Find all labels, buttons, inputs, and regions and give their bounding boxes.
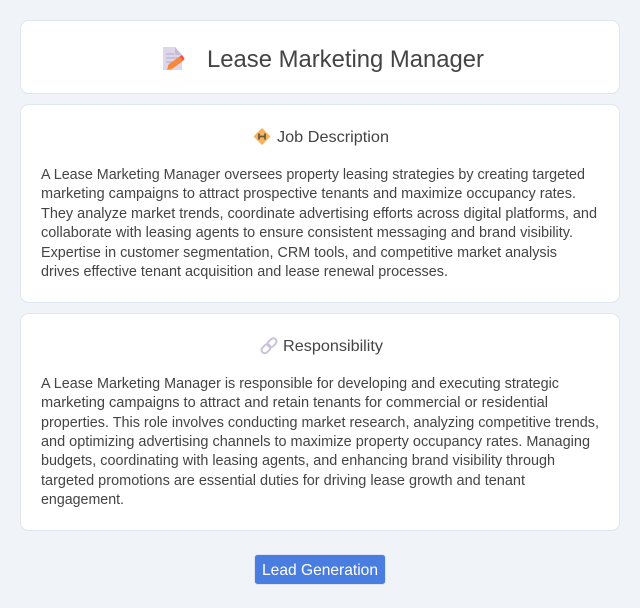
text block: responsibility — [41, 376, 599, 508]
panel: job description — [20, 104, 620, 302]
text block: job description: drives effective tenant acquisition and lease renewal processes. — [41, 264, 448, 280]
text block: responsibility: A Lease Marketing Manager is responsible for developing and executing strategic — [41, 376, 559, 392]
heading: Lease Marketing Manager: Lease Marketing Manager — [207, 46, 484, 73]
icon: chain link — [260, 337, 278, 355]
text block: job description: A Lease Marketing Manager oversees property leasing strategies by creating targeted — [41, 167, 585, 183]
text block: responsibility: marketing campaigns to attract and retain tenants for commercial or residential — [41, 395, 548, 411]
panel: title — [20, 20, 620, 94]
text block: responsibility: targeted promotions are essential duties for driving lease growth and tenant — [41, 473, 525, 489]
text block: responsibility: budgets, coordinating with leasing agents, and enhancing brand visibility through — [41, 453, 555, 469]
text block: job description: They analyze market trends, coordinate advertising efforts across digital platforms, and — [41, 206, 597, 222]
button: Lead Generation: Lead Generation — [262, 562, 378, 579]
text block: job description: marketing campaigns to attract prospective tenants and maximize occupancy rates. — [41, 186, 576, 202]
text block: responsibility: properties. This role involves conducting market research, analyzing competitive trends, — [41, 415, 599, 431]
heading: Responsibility: Responsibility — [283, 338, 383, 355]
text block: responsibility: and optimizing advertising channels to maximize property occupancy rates. Managing — [41, 434, 590, 450]
icon: diamond sign — [254, 128, 270, 145]
text block: responsibility: engagement. — [41, 492, 124, 508]
icon: document with pencil — [163, 47, 184, 70]
heading: Job Description: Job Description — [277, 129, 389, 146]
panel: responsibility — [20, 314, 620, 530]
button: Lead Generation — [254, 554, 386, 584]
text block: job description: collaborate with leasing agents to ensure consistent messaging and brand visibility. — [41, 225, 573, 241]
text block: job description: Expertise in customer segmentation, CRM tools, and competitive market analysis — [41, 245, 557, 261]
text block: job description — [41, 167, 597, 280]
